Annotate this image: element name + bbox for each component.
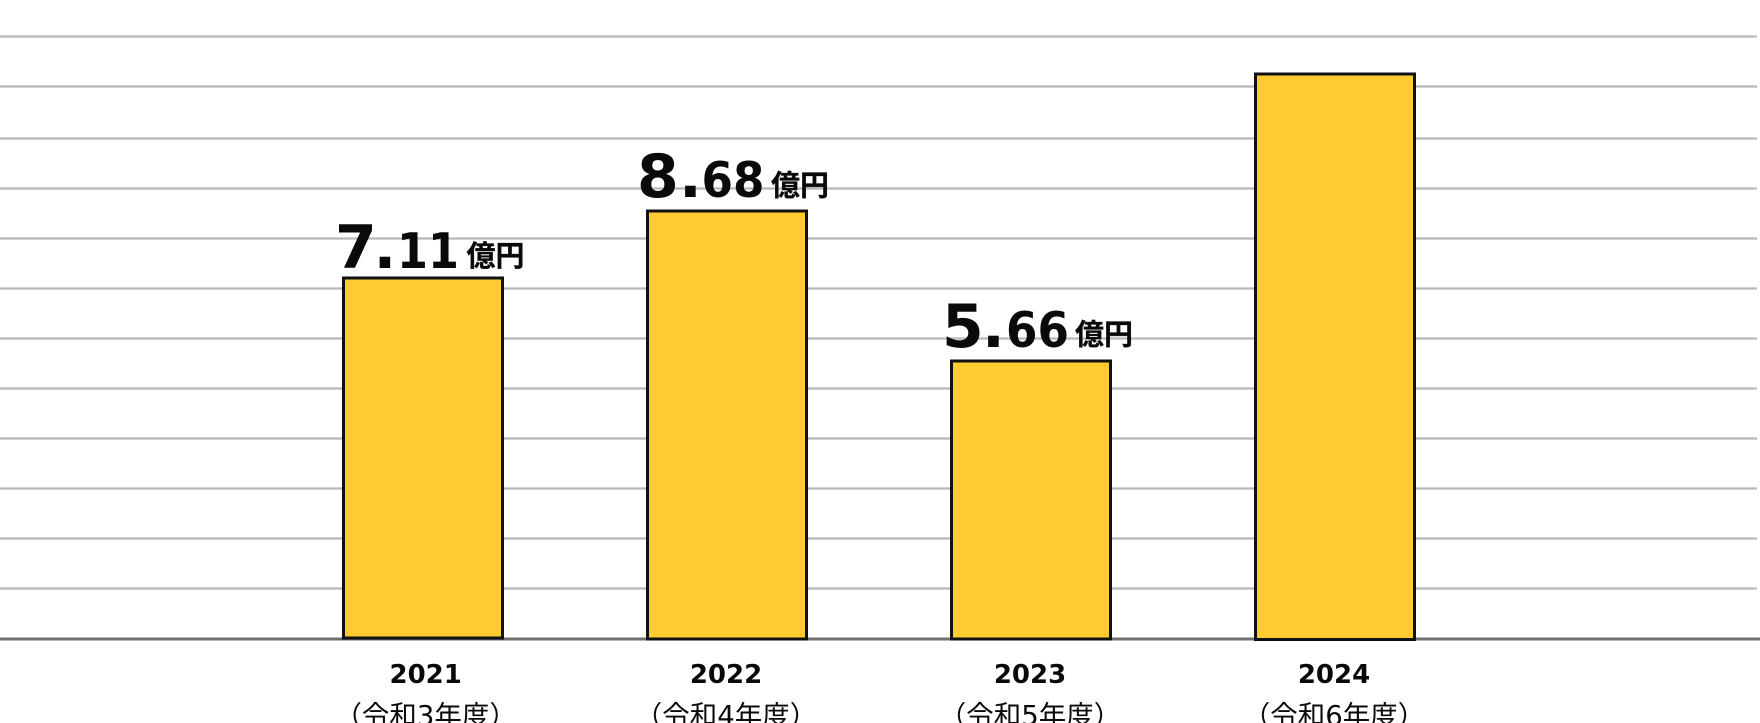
axis label: 2023 (939, 660, 1121, 723)
value label: 2023: 億円 (1075, 318, 1133, 352)
axis label: 2021: 2021 (390, 660, 462, 690)
value label: 2023: . (982, 292, 1005, 362)
axis label: 2024: 2024 (1298, 660, 1370, 690)
value label: 2022: 億円 (771, 168, 829, 202)
bar: 2022 (648, 211, 806, 639)
value label: 2022: 68 (702, 152, 764, 209)
value label: 2022: 8 (637, 142, 679, 212)
axis baseline (0, 638, 1760, 640)
axis label: 2022: 2022 (690, 660, 762, 690)
value label: 2021: 11 (397, 223, 459, 280)
bar: 2023 (952, 361, 1110, 639)
value label: 2023 (942, 292, 1133, 362)
axis label: 2024 (1243, 660, 1425, 723)
value label: 2021 (335, 213, 525, 283)
value label: 2023: 66 (1006, 302, 1069, 359)
axis label: 2022 (635, 660, 817, 723)
value label: 2022: . (679, 142, 702, 212)
value label: 2022 (637, 142, 829, 212)
bar: 2021 (344, 278, 502, 638)
axis label: 2023: 2023 (994, 660, 1066, 690)
value label: 2021: 億円 (466, 239, 525, 273)
value label: 2021: . (374, 213, 396, 283)
value label: 2023: 5 (942, 292, 984, 362)
value label: 2021: 7 (335, 213, 377, 283)
axis label: 2021 (334, 660, 517, 723)
bar: 2024 (1256, 74, 1414, 640)
